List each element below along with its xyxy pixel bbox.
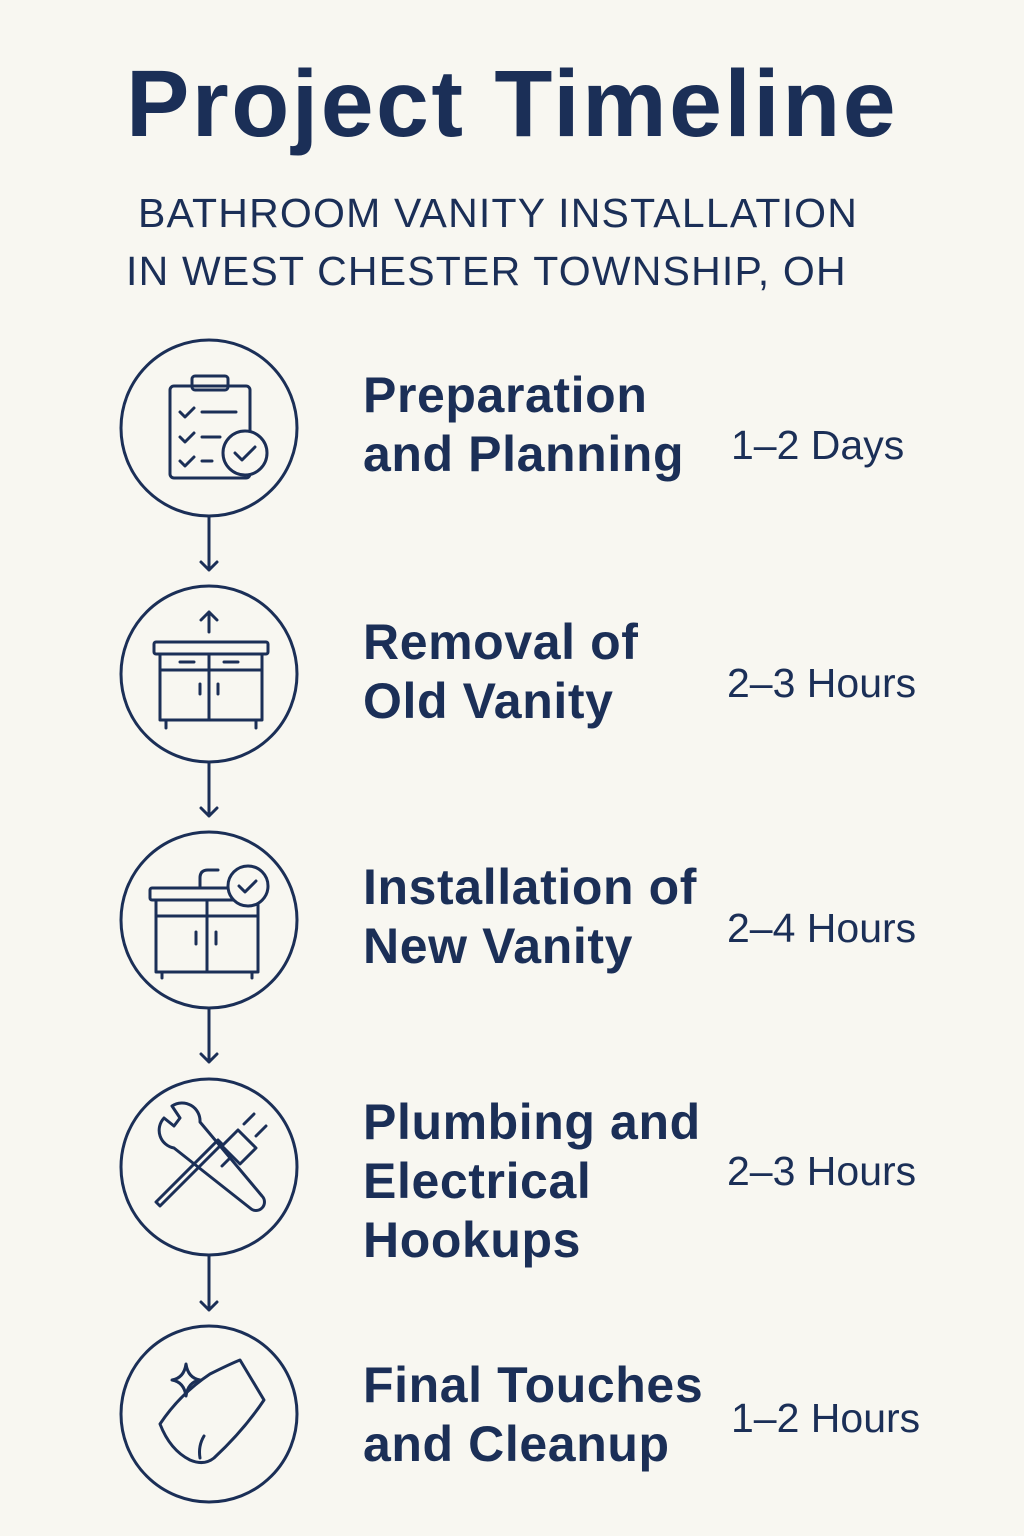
arrow bbox=[201, 1008, 217, 1062]
subtitle bbox=[126, 190, 858, 294]
icon: wrench and plug bbox=[121, 1079, 297, 1255]
step 4: Hookups bbox=[363, 1212, 581, 1268]
duration 3: 2–4 Hours bbox=[727, 905, 916, 951]
step 4: Electrical bbox=[363, 1153, 591, 1209]
subtitle: IN WEST CHESTER TOWNSHIP, OH bbox=[126, 248, 847, 294]
arrow bbox=[201, 762, 217, 816]
arrow bbox=[201, 1256, 217, 1310]
duration 2: 2–3 Hours bbox=[727, 660, 916, 706]
step 2: Old Vanity bbox=[363, 673, 614, 729]
icon: old vanity removal bbox=[121, 586, 297, 762]
title: Project Timeline bbox=[126, 51, 898, 157]
step 1 bbox=[363, 367, 684, 482]
duration 1: 1–2 Days bbox=[731, 422, 904, 468]
step 3: Installation of bbox=[363, 859, 697, 915]
step 2 bbox=[363, 614, 639, 729]
step 1: and Planning bbox=[363, 426, 684, 482]
step 2: Removal of bbox=[363, 614, 639, 670]
subtitle: BATHROOM VANITY INSTALLATION bbox=[138, 190, 858, 236]
step 3: New Vanity bbox=[363, 918, 633, 974]
step 1: Preparation bbox=[363, 367, 647, 423]
step 4: Plumbing and bbox=[363, 1094, 701, 1150]
icon: cleaning cloth bbox=[121, 1326, 297, 1502]
step 5: Final Touches bbox=[363, 1357, 703, 1413]
icon: new vanity bbox=[121, 832, 297, 1008]
step 4 bbox=[363, 1094, 701, 1268]
duration 4: 2–3 Hours bbox=[727, 1148, 916, 1194]
step 5: and Cleanup bbox=[363, 1416, 670, 1472]
duration 5: 1–2 Hours bbox=[731, 1395, 920, 1441]
timeline icons and arrows bbox=[120, 338, 298, 1504]
icon: clipboard bbox=[121, 340, 297, 516]
step 5 bbox=[363, 1357, 703, 1472]
step 3 bbox=[363, 859, 697, 974]
arrow bbox=[201, 516, 217, 570]
